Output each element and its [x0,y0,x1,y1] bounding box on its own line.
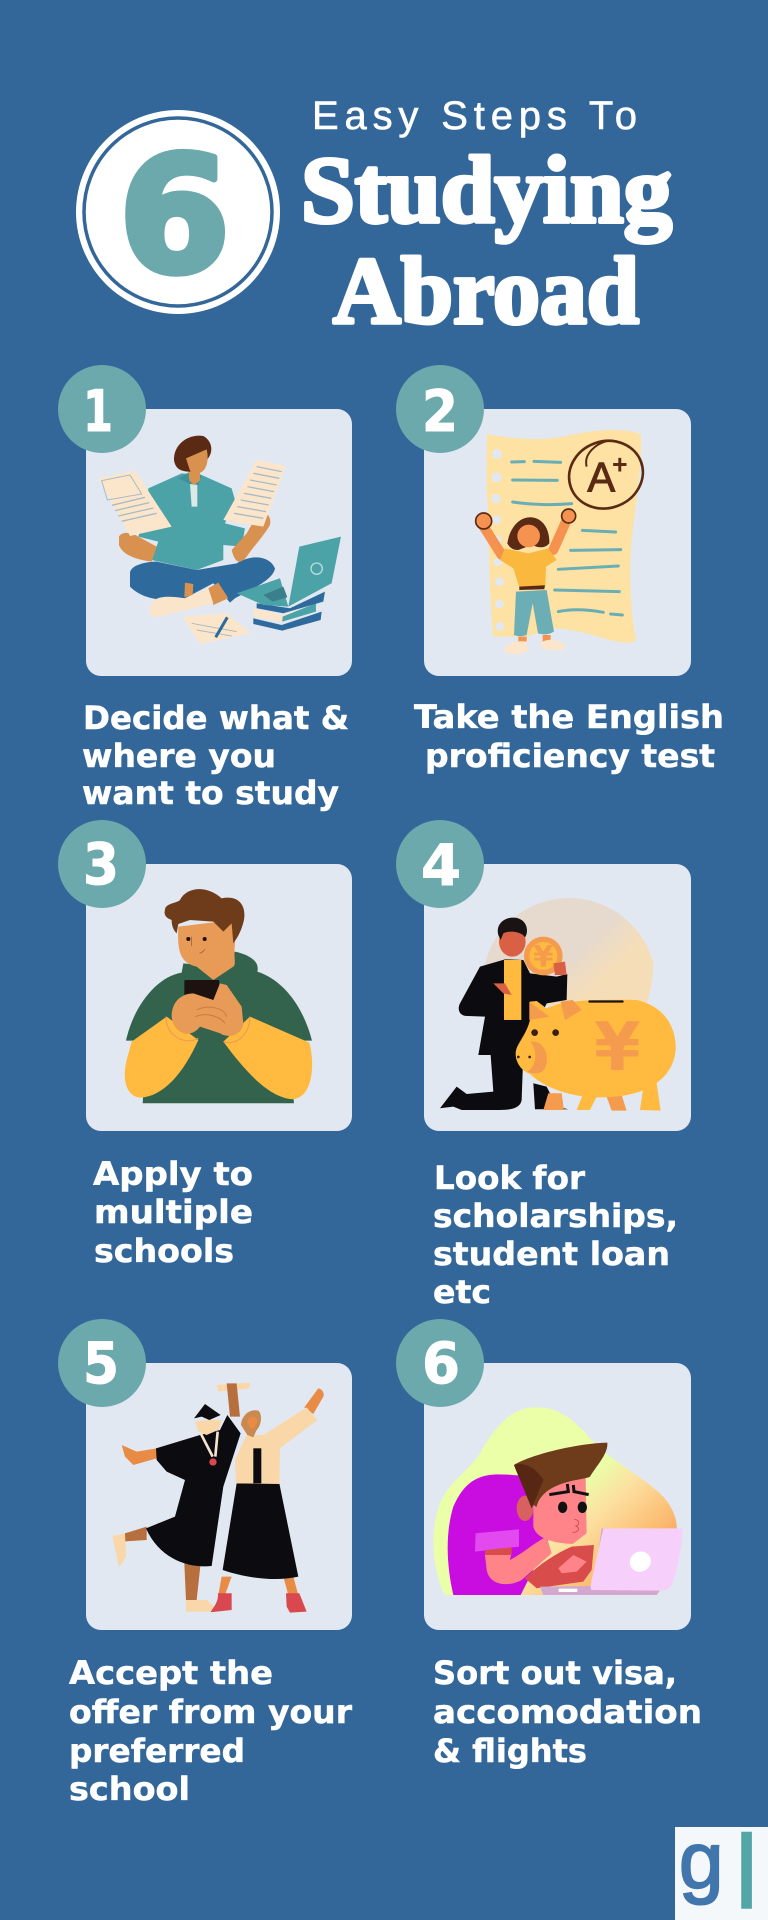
panel: step 5 [58,1319,352,1630]
panel: step 2 [396,365,691,676]
label: step 3: schools [94,1232,234,1270]
panel: step 3 [58,820,352,1131]
illustration: boy using phone [125,889,312,1103]
panel: step 1 [58,365,352,676]
title [301,94,672,344]
label: step 2: proficiency test [425,737,715,775]
label: step 6 [433,1654,702,1770]
label: step 5: Accept the [69,1654,273,1692]
badge 3 [58,820,146,908]
logo: gl: g [679,1816,724,1905]
badge 6 [396,1319,484,1407]
illustration: girl and A+ paper [476,430,652,654]
label: step 1 [82,699,349,812]
label: step 4: student loan [433,1235,670,1273]
illustration: girl and A+ paper: + [612,449,628,479]
label: step 5 [69,1654,352,1808]
label: step 5: school [69,1770,190,1808]
title: Abroad [333,238,639,344]
illustration: man with coin and piggy bank: ¥ [533,940,554,974]
illustration: man with coin and piggy bank: ¥ [594,1008,640,1086]
badge 1: 1 [83,379,113,445]
label: step 4: scholarships, [433,1197,678,1235]
badge 6: 6 [422,1331,460,1397]
badge 1 [58,365,146,453]
badge 5 [58,1319,146,1407]
label: step 3: multiple [94,1193,253,1231]
label: step 2: Take the English [414,698,724,736]
badge 2: 2 [422,379,458,445]
big number 6: 6 [119,122,230,309]
badge 5: 5 [83,1331,119,1397]
label: step 6: & flights [433,1732,587,1770]
label: step 2 [414,698,724,775]
illustration: boy at laptop [433,1407,683,1595]
badge 4: 4 [421,833,461,899]
label: step 1: Decide what & [83,699,349,737]
label: step 5: preferred [69,1732,245,1770]
title: Easy Steps To [312,94,637,138]
label: step 6: accomodation [433,1693,702,1731]
label: step 6: Sort out visa, [433,1654,677,1692]
label: step 3 [93,1155,253,1270]
illustration: graduation celebration [112,1383,324,1613]
title: Studying [301,137,672,243]
label: step 4 [433,1159,678,1311]
panel: step 6 [396,1319,691,1630]
label: step 1: where you [82,737,276,775]
illustration: girl and A+ paper: A [587,454,615,501]
badge 2 [396,365,484,453]
illustration: man with coin and piggy bank [440,898,676,1111]
label: step 4: Look for [434,1159,585,1197]
label: step 3: Apply to [93,1155,253,1193]
label: step 4: etc [433,1273,491,1311]
illustration: student with papers and laptop [98,436,341,644]
header: 6 badge [76,110,280,314]
logo: gl [675,1815,768,1920]
badge 3: 3 [83,832,119,898]
label: step 1: want to study [82,774,339,812]
panel: step 4 [396,820,691,1131]
label: step 5: offer from your [69,1693,352,1731]
badge 4 [396,820,484,908]
